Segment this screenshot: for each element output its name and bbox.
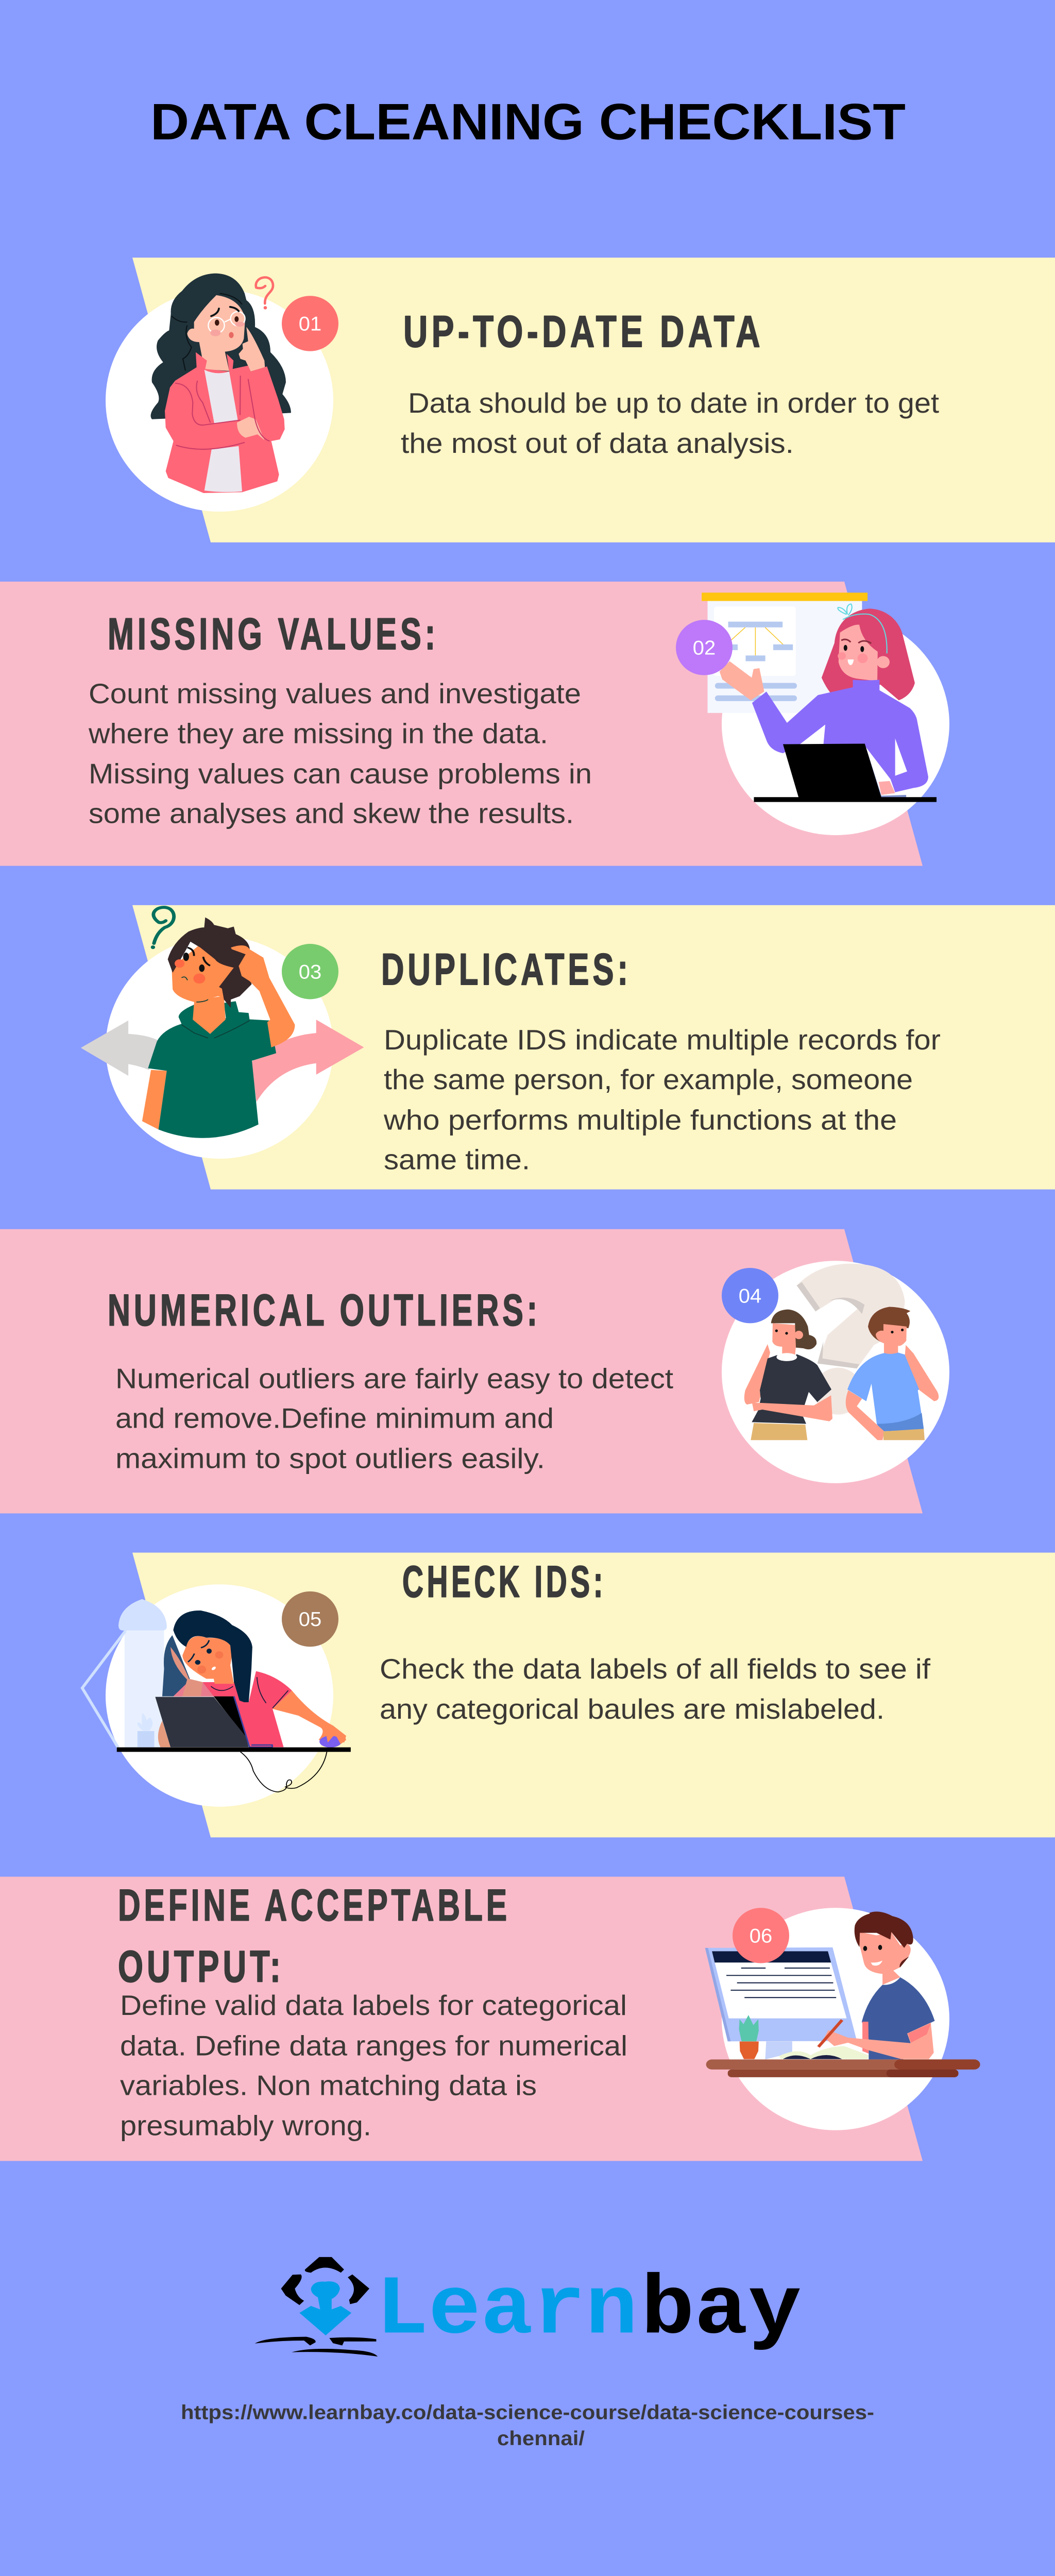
body text: any categorical baules are mislabeled. [380,1693,884,1725]
white circle [106,290,333,512]
number badge 01: 01 [299,313,321,335]
footer url [181,2401,874,2450]
body text: variables. Non matching data is [120,2070,537,2101]
illustration: two people thinking with question mark [744,1264,939,1440]
body text: the most out of data analysis. [401,428,794,459]
heading: UP-TO-DATE DATA [403,307,764,357]
body text [115,1363,673,1474]
number badge 06 [733,1908,789,1963]
panel band [0,1229,923,1514]
number badge 04 [722,1268,778,1323]
body text [383,1024,941,1175]
number badge 06: 06 [750,1925,772,1947]
number badge 02: 02 [693,637,716,659]
panel: missing values [0,582,949,866]
illustration: thinking woman with glasses [151,274,291,493]
number badge 04: 04 [739,1285,761,1307]
body text: the same person, for example, someone [384,1064,913,1095]
number badge 05: 05 [299,1608,321,1631]
heading: CHECK IDS: [402,1557,606,1606]
body text: Define valid data labels for categorical [120,1990,627,2021]
panel: up-to-date data [106,258,1055,543]
body text: same time. [384,1144,530,1175]
white circle [722,1261,949,1483]
number badge 02 [676,620,733,675]
body text [380,1653,931,1725]
panel band [132,905,1055,1190]
illustration: confused boy between two arrows [81,907,364,1138]
body text: Data should be up to date in order to get [408,387,939,419]
body text: who performs multiple functions at the [383,1104,897,1136]
number badge 03: 03 [299,961,321,983]
body text: maximum to spot outliers easily. [115,1443,545,1474]
footer url: https://www.learnbay.co/data-science-course/data-science-courses- [181,2401,874,2424]
heading: DUPLICATES: [381,945,632,994]
number badge 03 [282,944,338,999]
body text: and remove.Define minimum and [115,1402,554,1434]
panel: duplicates [81,905,1055,1190]
body text: data. Define data ranges for numerical [120,2030,627,2061]
heading: NUMERICAL OUTLIERS: [108,1285,541,1335]
heading [118,1880,511,1991]
body text [401,387,939,459]
panel band [132,1553,1055,1837]
body text: Check the data labels of all fields to see if [380,1653,931,1685]
logo: Learnbay: bay [641,2263,802,2358]
body text: where they are missing in the data. [88,718,548,749]
illustration: tired woman at laptop with lamp [82,1599,351,1792]
footer url: chennai/ [497,2428,585,2450]
panel: check IDs [82,1553,1055,1837]
panel band [132,258,1055,543]
logo wordmark: Learn [376,2263,638,2358]
panel: numerical outliers [0,1229,949,1514]
panel band [0,1877,923,2161]
heading: DEFINE ACCEPTABLE [118,1880,511,1930]
heading: OUTPUT: [118,1942,284,1991]
illustration: man writing at desk with monitor [705,1911,980,2077]
body text: some analyses and skew the results. [89,798,574,829]
logo icon [255,2257,378,2357]
white circle [106,936,333,1159]
body text [120,1990,627,2141]
panel: define acceptable output [0,1877,980,2161]
body text: Missing values can cause problems in [89,758,592,789]
heading: MISSING VALUES: [108,609,439,659]
body text [88,678,592,829]
title: DATA CLEANING CHECKLIST [150,94,906,150]
panel band [0,582,923,866]
white circle [106,1584,333,1807]
body text: Count missing values and investigate [89,678,581,709]
white circle [722,1908,949,2130]
number badge 05 [282,1591,338,1647]
logo: Learnbay [255,2257,802,2358]
illustration: woman presenting a chart [702,592,937,802]
body text: Numerical outliers are fairly easy to detect [115,1363,673,1394]
body text: Duplicate IDS indicate multiple records for [384,1024,941,1056]
white circle [722,613,949,835]
body text: presumably wrong. [120,2110,371,2141]
number badge 01 [282,296,338,351]
